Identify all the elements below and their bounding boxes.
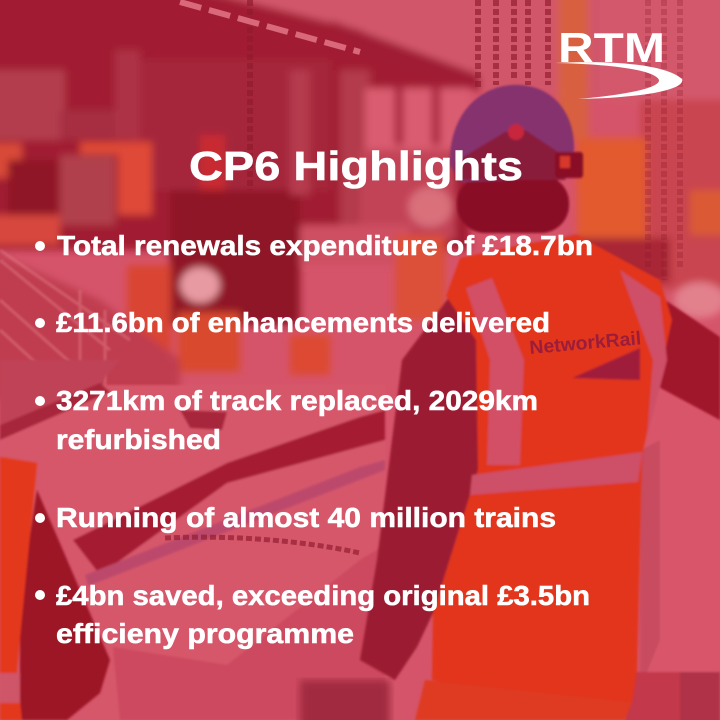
Network Rail wordmark on vest: NetworkRail	[529, 328, 642, 359]
RTM logo	[555, 24, 682, 99]
bullet 3	[35, 385, 538, 455]
Network Rail vest logo	[572, 348, 640, 380]
chains	[165, 0, 548, 553]
bullet 5: £4bn saved, exceeding original £3.5bn	[56, 580, 590, 611]
foreground worker	[360, 85, 720, 720]
bullet 5	[35, 580, 590, 649]
bullet list	[35, 230, 593, 649]
concrete track slabs	[0, 360, 720, 720]
bullet 5: efficieny programme	[56, 618, 354, 649]
title: CP6 Highlights	[189, 143, 523, 189]
logo swoosh	[555, 62, 682, 99]
bottom-centre tools	[300, 680, 390, 720]
bullet 2: £11.6bn of enhancements delivered	[56, 307, 550, 338]
central machine	[170, 190, 300, 325]
equipment: orange frame on left	[80, 142, 152, 154]
bullet 4: Running of almost 40 million trains	[56, 502, 556, 533]
sleeves	[360, 296, 480, 680]
workers in mid distance	[127, 265, 171, 385]
vest	[432, 235, 672, 707]
bullet 3: refurbished	[56, 424, 221, 455]
bullet 1: Total renewals expenditure of £18.7bn	[57, 230, 593, 261]
blurred far background	[0, 0, 720, 400]
canopy edge lights	[180, 2, 360, 52]
bottom-left worker	[0, 457, 110, 720]
stairs on the left	[0, 250, 180, 400]
bullet 3: 3271km of track replaced, 2029km	[56, 385, 538, 416]
worker at far right	[674, 282, 720, 318]
hard hat	[450, 85, 574, 182]
logo letters: RTM	[558, 24, 665, 71]
reflective strips	[466, 278, 524, 465]
head	[457, 175, 569, 233]
stair rails	[0, 250, 130, 395]
